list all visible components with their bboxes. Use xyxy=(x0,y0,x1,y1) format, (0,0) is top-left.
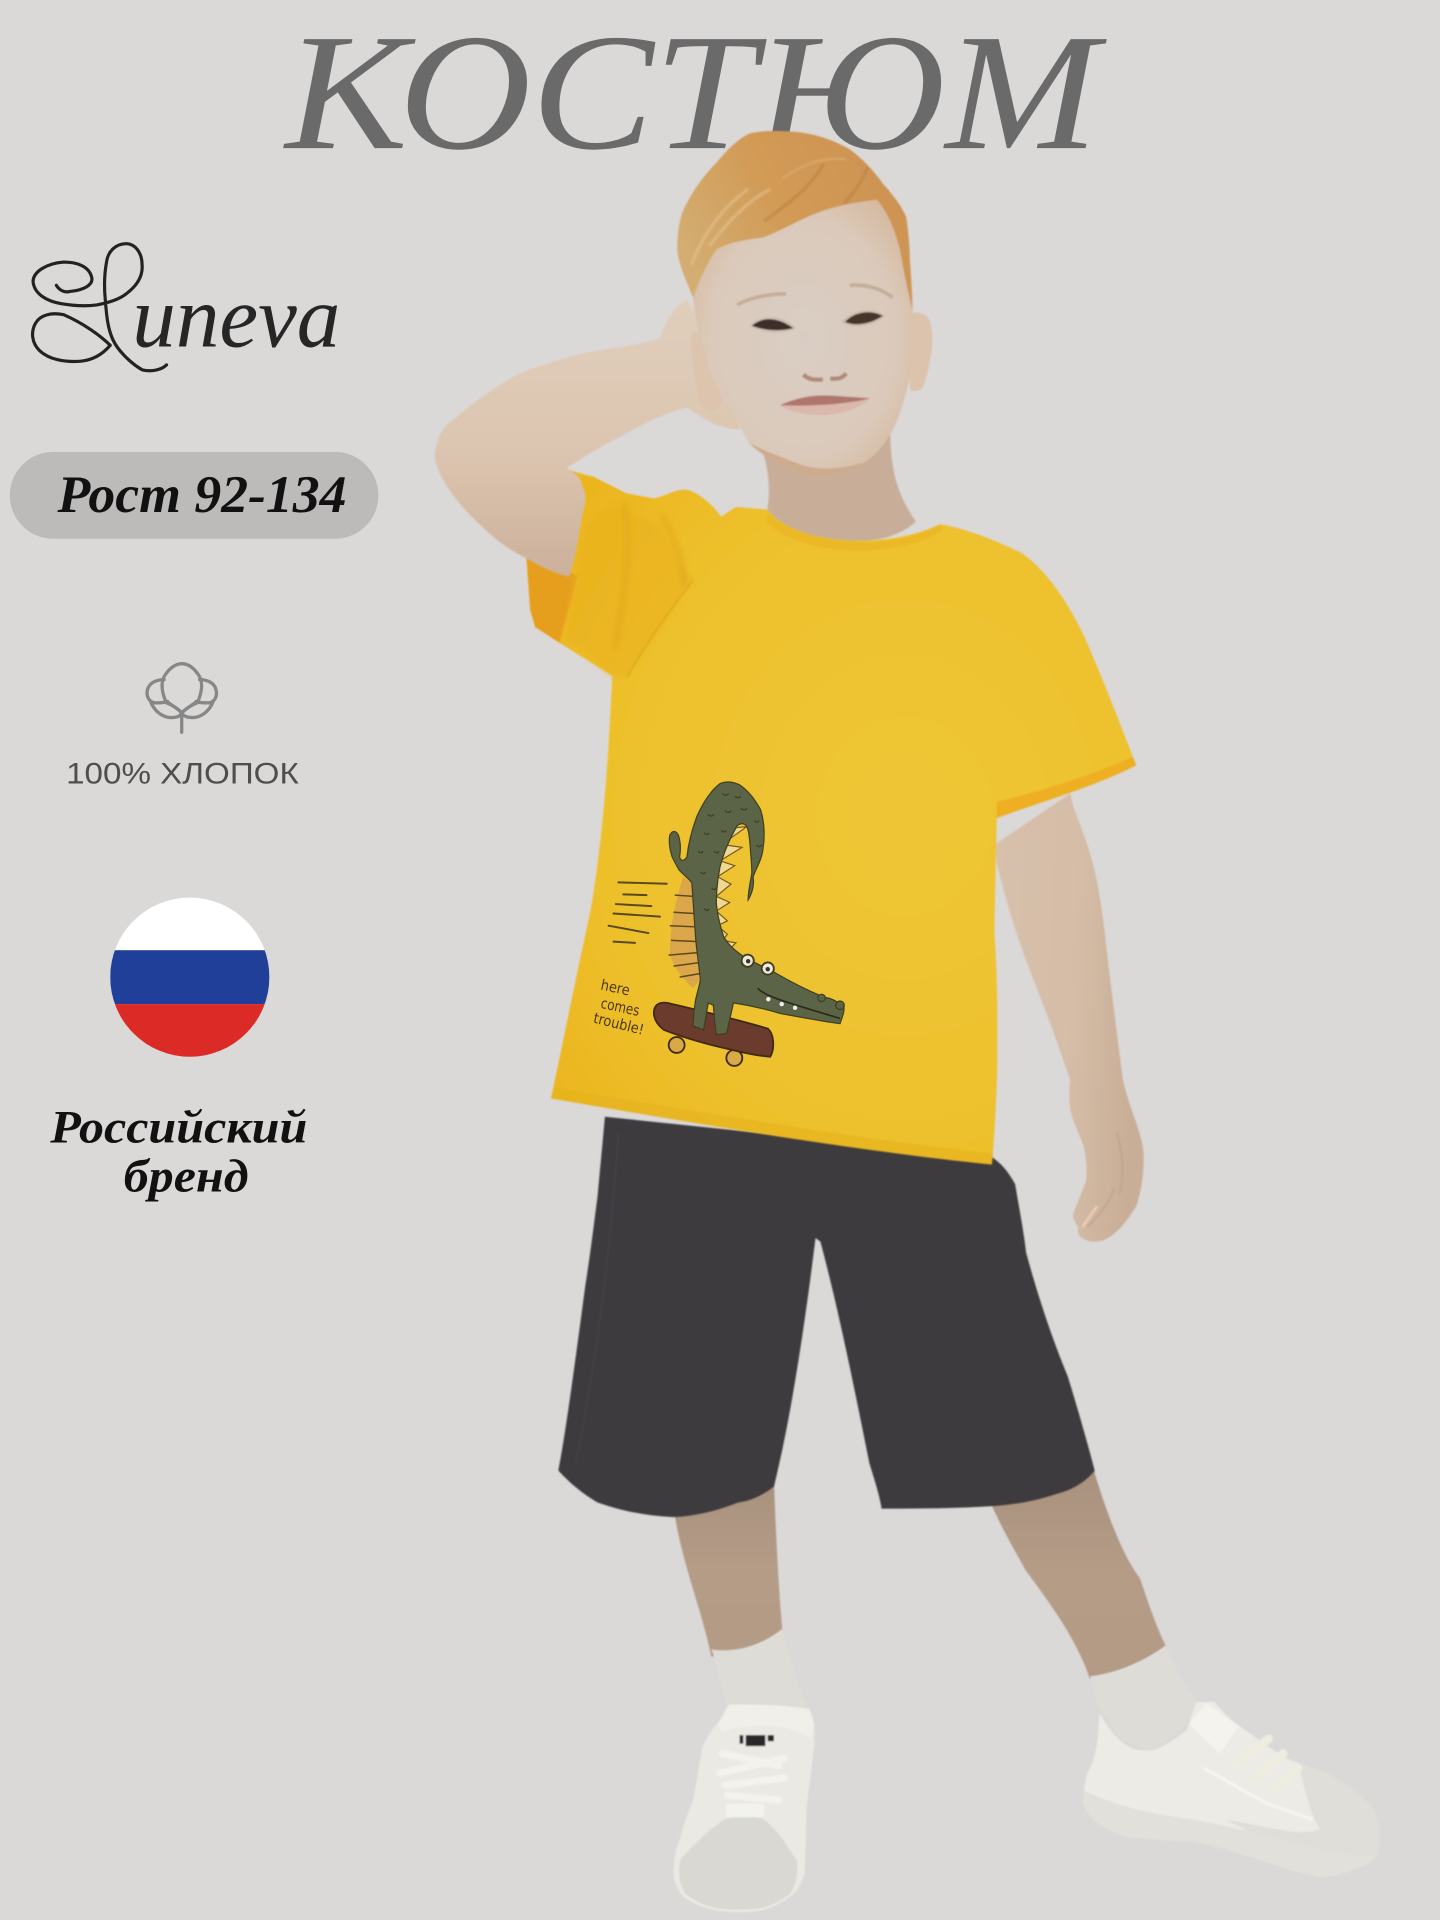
left ear xyxy=(692,333,722,412)
raised arm xyxy=(435,300,740,577)
boy figure xyxy=(435,131,1379,1912)
toe cap xyxy=(1224,1763,1379,1877)
russian brand caption: бренд xyxy=(124,1151,249,1202)
shoe laces xyxy=(1237,1739,1298,1790)
left leg xyxy=(673,1482,782,1657)
mouth xyxy=(780,396,871,415)
belly stripes xyxy=(669,877,700,988)
nose xyxy=(803,373,846,380)
sleeve hem xyxy=(997,757,1136,818)
shoe tag xyxy=(740,1735,774,1746)
chin shadow xyxy=(749,443,863,478)
title: КОСТЮМ xyxy=(283,1,1107,185)
sole xyxy=(1084,1790,1376,1877)
snout line and teeth xyxy=(758,988,844,1018)
head xyxy=(677,131,932,478)
right sock xyxy=(1090,1646,1198,1751)
height pill: Рост 92-134 xyxy=(57,466,347,524)
collar xyxy=(765,514,943,550)
right shoe xyxy=(1084,1702,1379,1877)
cotton label: 100% ХЛОПОК xyxy=(66,758,299,791)
crocodile print xyxy=(592,782,844,1066)
shoe strap xyxy=(1189,1703,1239,1753)
brand logo: uneva xyxy=(132,269,340,367)
brand logo xyxy=(33,244,340,371)
left eye xyxy=(749,317,796,333)
print lettering: here xyxy=(599,977,631,999)
left shoe xyxy=(673,1704,815,1912)
crocodile eyes xyxy=(742,955,774,975)
shorts xyxy=(558,1117,1095,1517)
right leg xyxy=(989,1469,1166,1679)
print lettering: trouble! xyxy=(592,1010,646,1039)
speed lines xyxy=(609,882,667,943)
print lettering: comes xyxy=(599,995,641,1020)
t-shirt xyxy=(527,470,1136,1164)
icon: russian flag xyxy=(110,898,269,1058)
icon: cotton xyxy=(147,664,216,732)
neck xyxy=(757,435,916,543)
height pill xyxy=(10,452,378,539)
shoe laces xyxy=(720,1753,784,1800)
hair strands xyxy=(692,159,867,263)
print lettering xyxy=(592,977,646,1039)
eyebrows xyxy=(737,285,893,305)
underside of sleeve xyxy=(527,558,578,643)
left sock xyxy=(711,1629,811,1711)
skateboard xyxy=(654,1003,773,1066)
face xyxy=(693,200,913,478)
crocodile scales xyxy=(698,793,762,910)
right eye xyxy=(841,310,885,326)
crocodile body xyxy=(669,782,844,1035)
hair xyxy=(677,131,912,310)
teeth xyxy=(704,827,747,959)
right arm and hand xyxy=(994,793,1144,1242)
sleeve folds xyxy=(563,502,693,677)
russian brand caption: Российский xyxy=(49,1102,307,1153)
russian brand caption xyxy=(49,1102,307,1202)
hem xyxy=(551,1087,993,1164)
right ear xyxy=(910,313,932,391)
